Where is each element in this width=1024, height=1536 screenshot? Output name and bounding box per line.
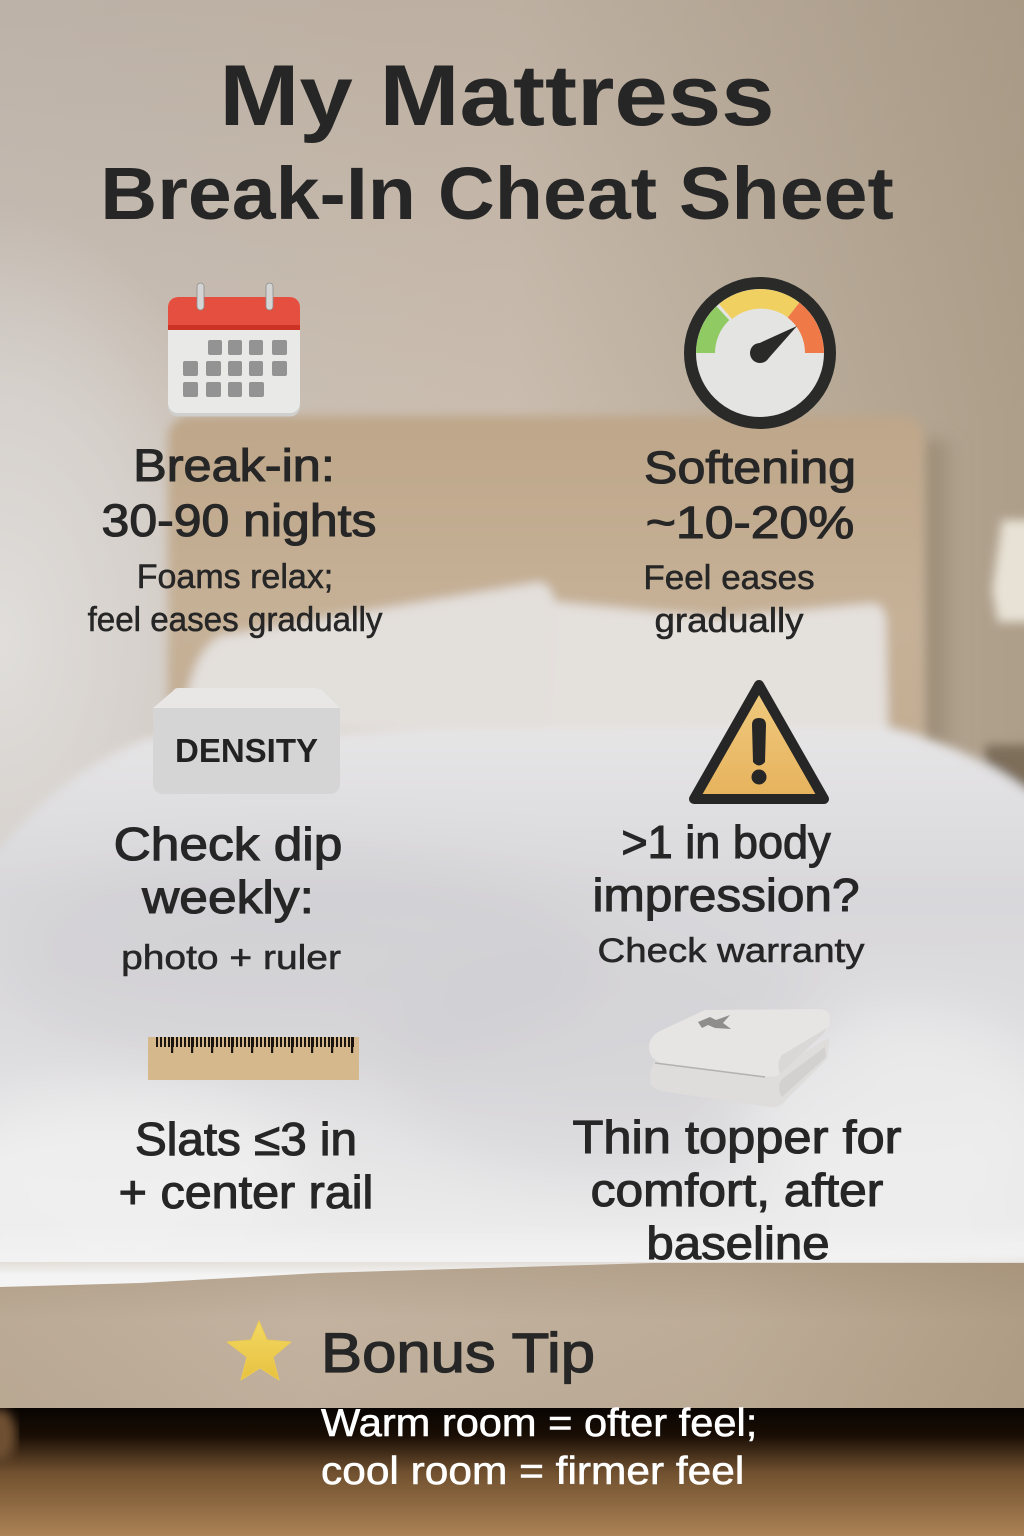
text: bonus tip detail: Warm room = ofter feel; [321, 1402, 757, 1445]
text: body impression: impression? [592, 869, 860, 921]
text: bonus tip detail: cool room = firmer feel [321, 1450, 744, 1493]
text: slats: Slats ≤3 in [135, 1113, 357, 1165]
icon: star [226, 1320, 292, 1380]
icon: ruler [148, 1037, 359, 1080]
title: My Mattress [219, 48, 775, 144]
icon: calendar [168, 282, 300, 416]
text: break-in detail: Foams relax; [137, 558, 333, 596]
text: photo + ruler: photo + ruler [121, 939, 341, 977]
text: thin topper [572, 1111, 902, 1269]
text: slats: + center rail [119, 1166, 373, 1218]
icon: density foam block: DENSITY [175, 732, 318, 769]
text: thin topper: comfort, after [591, 1164, 883, 1216]
icon: warning triangle [689, 680, 829, 804]
text: break-in heading: Break-in: [133, 440, 335, 491]
text: break-in heading: 30-90 nights [102, 495, 376, 546]
text: softening detail: gradually [654, 602, 804, 640]
mattress base [0, 1262, 1024, 1408]
text: bonus tip detail [320, 1402, 757, 1493]
text: break-in detail [88, 558, 383, 639]
subtitle: Break-In Cheat Sheet [100, 152, 894, 235]
duvet hem [0, 1225, 1024, 1287]
text: bonus tip: Bonus Tip [321, 1321, 595, 1384]
text: check dip: weekly: [142, 871, 314, 923]
floor [0, 1408, 1024, 1536]
text: check dip [114, 818, 342, 923]
text: break-in heading [102, 440, 376, 546]
text: body impression: >1 in body [621, 816, 831, 868]
text: thin topper: Thin topper for [572, 1111, 902, 1163]
icon: density foam block [153, 688, 340, 794]
text: slats [119, 1113, 373, 1218]
text: body impression [592, 816, 860, 921]
icon: folded topper [649, 1009, 829, 1107]
text: thin topper: baseline [646, 1217, 830, 1269]
text: check warranty: Check warranty [598, 932, 864, 970]
text: softening heading: Softening [644, 442, 856, 493]
text: softening detail: Feel eases [643, 559, 815, 597]
icon: gauge [684, 277, 836, 429]
text: check dip: Check dip [114, 818, 342, 870]
text: softening heading: ~10-20% [646, 497, 854, 548]
text: softening detail [643, 559, 815, 640]
text: softening heading [644, 442, 856, 548]
text: break-in detail: feel eases gradually [88, 601, 382, 639]
